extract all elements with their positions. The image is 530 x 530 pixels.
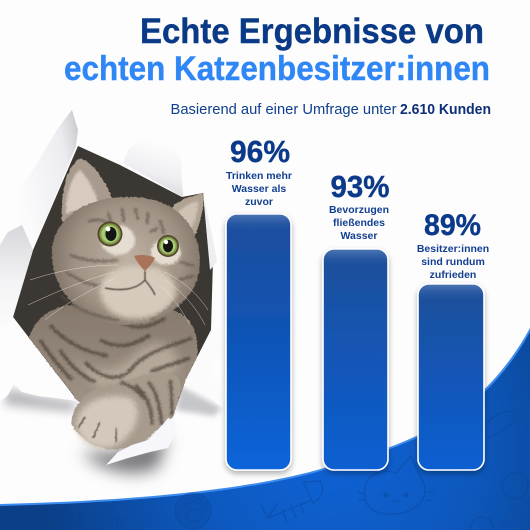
paper shadows — [5, 386, 222, 473]
icon: fish bowl — [60, 411, 528, 530]
icon: fish bone — [261, 481, 322, 522]
stat 93%: fließendes — [333, 217, 385, 229]
icon: paw outline — [175, 493, 211, 529]
cat body — [28, 304, 198, 419]
cat eyes — [98, 222, 179, 257]
cat muzzle — [100, 265, 176, 319]
title line 1: Echte Ergebnisse von — [140, 12, 484, 51]
stat 93% — [329, 170, 390, 242]
whiskers — [28, 265, 208, 325]
paper flaps — [0, 110, 223, 408]
wave background — [0, 328, 530, 530]
stat 89%: 89% — [424, 209, 481, 242]
stat 89%: sind rundum — [421, 256, 485, 268]
body stripes — [40, 318, 192, 382]
stat 96% — [226, 134, 292, 208]
head stripes — [60, 208, 194, 320]
subtitle: 2.610 Kunden — [400, 102, 491, 118]
stat 96%: Trinken mehr — [226, 170, 292, 182]
stat 89%: zufrieden — [430, 269, 476, 281]
cat ears — [62, 158, 203, 242]
cat — [28, 158, 203, 449]
stat 89%: Besitzer:innen — [417, 243, 489, 255]
illustration: cat in torn paper — [0, 110, 223, 473]
bar 1 — [226, 214, 291, 470]
stat 96%: 96% — [230, 134, 290, 169]
stat 96%: Wasser als — [232, 183, 286, 195]
stat 89% — [417, 209, 489, 281]
bar 2 — [323, 249, 388, 470]
cat paw — [72, 372, 181, 449]
bar 3 — [418, 284, 484, 470]
cat nose and mouth — [105, 255, 155, 295]
title line 2: echten Katzenbesitzer:innen — [64, 50, 490, 88]
stat 93%: 93% — [330, 170, 390, 204]
subtitle: Basierend auf einer Umfrage unter — [170, 102, 397, 118]
body light fur — [70, 343, 178, 390]
stat 96%: zuvor — [245, 196, 273, 208]
stat 93%: Wasser — [341, 230, 377, 242]
torn opening — [13, 146, 213, 432]
stat 93%: Bevorzugen — [329, 204, 389, 216]
bar chart — [226, 214, 484, 470]
subtitle — [170, 102, 491, 118]
cat head — [52, 197, 200, 325]
eye highlights — [101, 225, 181, 265]
front paper tear — [106, 418, 176, 465]
icon: cat face — [358, 456, 434, 514]
title — [64, 12, 490, 88]
